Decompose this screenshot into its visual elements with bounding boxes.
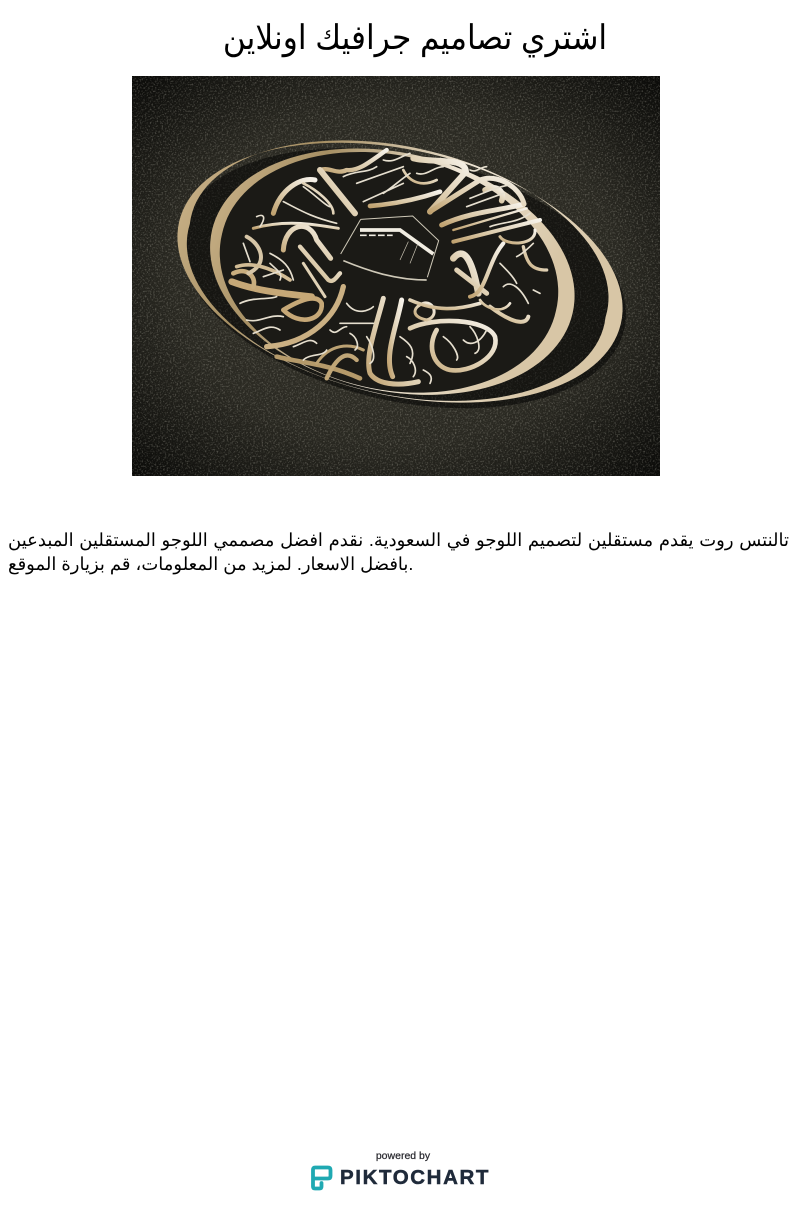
- kaaba outline: [341, 216, 439, 280]
- photo: gold Arabic calligraphy emblem on dark stone: [132, 76, 660, 476]
- outer crescent ring: [177, 140, 623, 403]
- emblem shadow: [155, 108, 652, 449]
- disc interior: [185, 114, 599, 429]
- footer: powered by Piktochart: [311, 1150, 490, 1190]
- title: اشتري تصاميم جرافيك اونلاين: [223, 19, 607, 57]
- wordmark: PIKTOCHART: [340, 1166, 490, 1189]
- body paragraph: تالنتس روت يقدم مستقلين لتصميم اللوجو في السعودية. نقدم افضل مصممي اللوجو المستقلين المبدعين بافضل الاسعار. لمزيد من المعلومات، قم بزيارة الموقع.: [8, 530, 789, 574]
- icon: Piktochart logo: [311, 1166, 332, 1190]
- emblem: [155, 108, 652, 449]
- calligraphy: thin diacritics: [240, 153, 540, 383]
- calligraphy: bold strokes: [232, 150, 547, 384]
- inner crescent ring: [210, 148, 575, 395]
- powered by label: powered by: [376, 1150, 430, 1162]
